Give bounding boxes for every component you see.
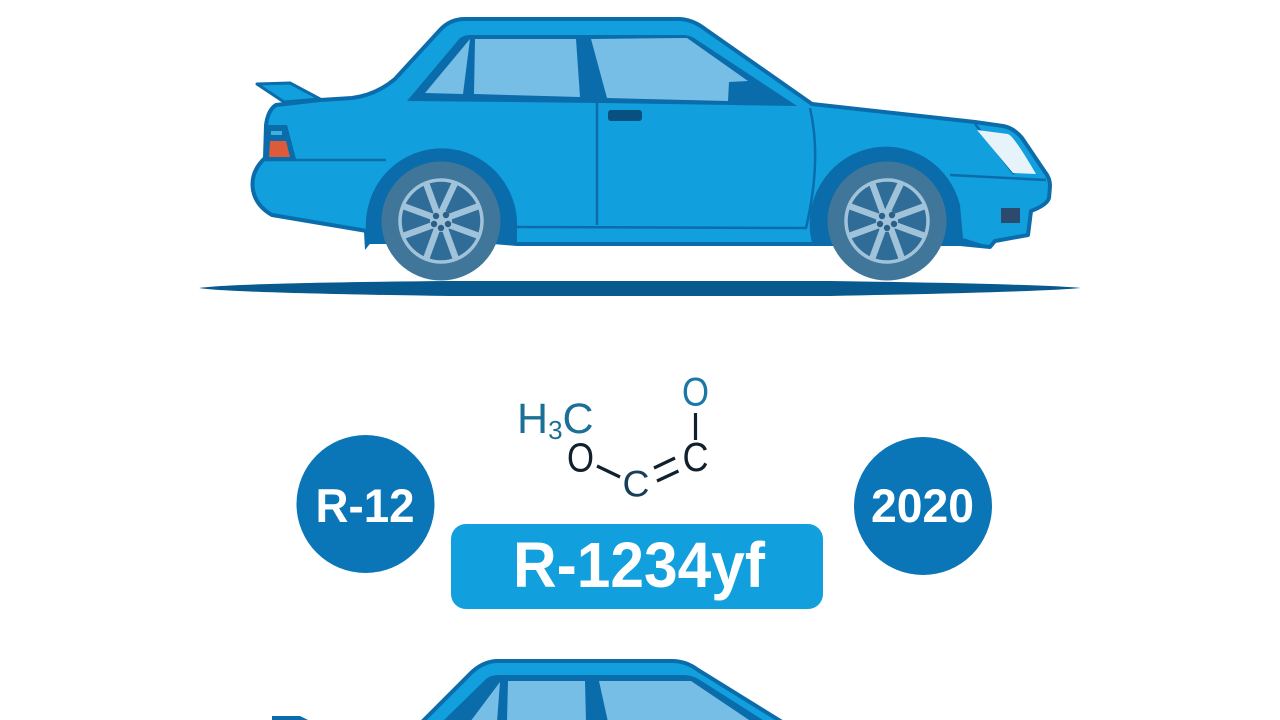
front wheel	[828, 162, 946, 280]
front side window	[599, 681, 752, 720]
quarter window	[470, 682, 500, 720]
illustration: blue car (bottom, cropped)	[272, 661, 782, 720]
spoiler tip	[272, 716, 308, 720]
chemical structure: 3	[548, 415, 563, 445]
chemical structure	[517, 370, 709, 504]
rear mud flap	[364, 232, 374, 250]
badge: 2020	[854, 437, 992, 575]
badge: 2020: 2020	[871, 479, 974, 532]
rear side window	[474, 39, 580, 97]
rear wheel arch	[366, 148, 517, 244]
window frame	[407, 35, 797, 106]
door handle	[608, 110, 642, 121]
window frame	[442, 675, 766, 720]
headlight	[977, 130, 1036, 174]
illustration: blue car (top)	[252, 19, 1050, 280]
fog light	[1001, 208, 1020, 223]
quarter window	[425, 39, 470, 94]
chemical structure: O	[682, 370, 709, 414]
ground shadow	[199, 281, 1081, 296]
chemical structure: C	[563, 395, 594, 443]
front side window	[591, 38, 748, 101]
front wheel arch	[810, 147, 985, 245]
chemical structure: O	[567, 434, 594, 480]
label: R-1234yf: R-1234yf	[513, 529, 766, 601]
spoiler	[257, 83, 320, 102]
car roof	[422, 661, 782, 720]
door and panel lines	[262, 102, 1046, 228]
chemical structure: C	[622, 464, 650, 504]
rear side window	[507, 681, 586, 720]
car body	[252, 19, 1050, 247]
badge: R-12: R-12	[316, 479, 414, 532]
rear wheel	[382, 162, 500, 280]
badge: R-12	[296, 435, 434, 573]
label: R-1234yf	[451, 524, 823, 609]
tail light	[266, 125, 296, 159]
chemical structure: C	[682, 434, 708, 480]
chemical structure: H	[517, 395, 548, 443]
